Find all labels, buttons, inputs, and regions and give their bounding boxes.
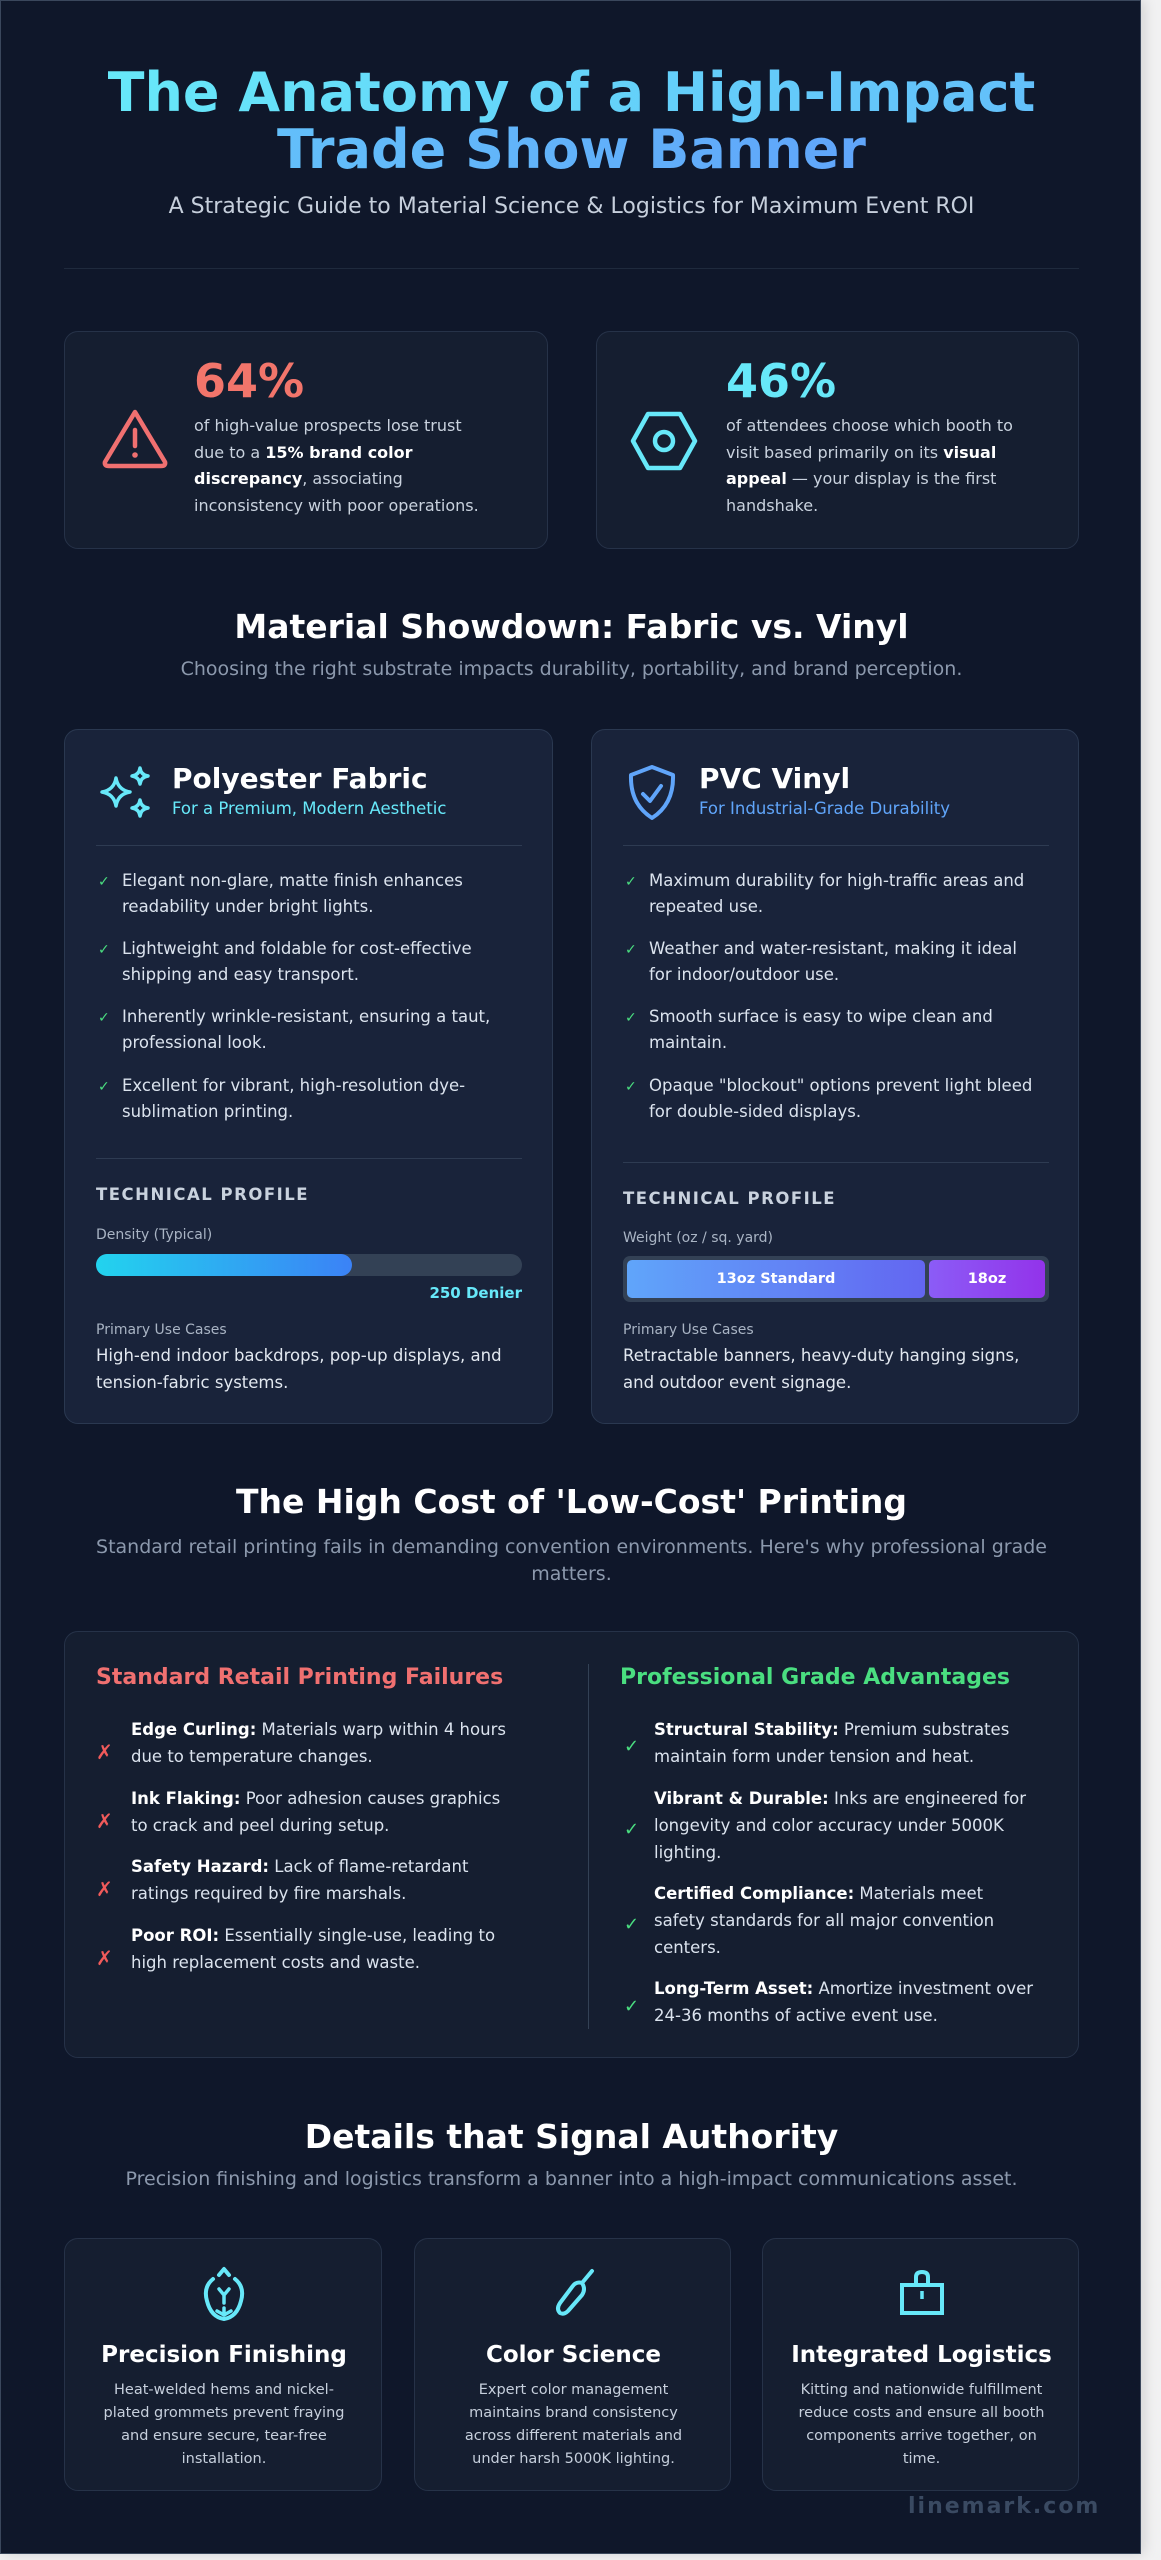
title: Polyester Fabric xyxy=(172,762,428,795)
column: advantages: maintain form under tension and heat. xyxy=(654,1747,974,1766)
title: PVC Vinyl xyxy=(699,762,850,795)
stat text: handshake. xyxy=(726,496,818,514)
column: failures: Safety Hazard: Lack of flame-retardant xyxy=(131,1857,468,1876)
column: failures xyxy=(96,1665,506,1972)
card: color science: Expert color management maintains brand consistency across different materials and under harsh 5000K lighting. xyxy=(465,2382,682,2467)
list: vinyl benefits: Weather and water-resistant, making it ideal xyxy=(649,939,1017,958)
subheading: Choosing the right substrate impacts durability, portability, and brand perception. xyxy=(181,658,962,680)
technical profile: Weight (oz / sq. yard) xyxy=(623,1230,773,1246)
list: vinyl benefits: repeated use. xyxy=(649,897,763,916)
list: fabric benefits: professional look. xyxy=(122,1033,267,1052)
icon: warning triangle xyxy=(102,410,168,468)
list: fabric benefits: ✓ xyxy=(98,942,110,958)
stat text: of attendees choose which booth to xyxy=(726,416,1013,435)
column: advantages xyxy=(620,1665,1034,2025)
list: vinyl benefits: maintain. xyxy=(649,1033,727,1052)
technical profile: High-end indoor backdrops, pop-up displays, and xyxy=(96,1346,502,1365)
title: Trade Show Banner xyxy=(277,118,866,181)
tagline: For a Premium, Modern Aesthetic xyxy=(172,799,446,818)
list: vinyl benefits: Maximum durability for high-traffic areas and xyxy=(649,871,1024,890)
list: fabric benefits: readability under bright lights. xyxy=(122,897,373,916)
stat text: of high-value prospects lose trust xyxy=(194,416,462,435)
panel: comparison xyxy=(64,1631,1079,2058)
icon: timer xyxy=(204,2266,244,2321)
list: vinyl benefits xyxy=(625,871,1032,1121)
technical profile: and outdoor event signage. xyxy=(623,1373,851,1392)
card: precision finishing xyxy=(64,2238,382,2491)
title xyxy=(108,61,1035,181)
column: advantages: Vibrant & Durable: Inks are engineered for xyxy=(654,1789,1026,1808)
stat text: due to a 15% brand color xyxy=(194,442,413,462)
column: failures: ✗ xyxy=(96,1740,113,1764)
column: advantages: safety standards for all major convention xyxy=(654,1911,994,1930)
card: precision finishing: Heat-welded hems and nickel-plated grommets prevent fraying and ensure secure, tear-free installation. xyxy=(104,2382,344,2467)
list: vinyl benefits: ✓ xyxy=(625,1010,637,1026)
panel: pvc vinyl xyxy=(591,729,1079,1424)
list: vinyl benefits: ✓ xyxy=(625,874,637,890)
column: failures: Ink Flaking: Poor adhesion causes graphics xyxy=(131,1789,500,1808)
column: failures: ratings required by fire marshals. xyxy=(131,1884,406,1903)
technical profile xyxy=(623,1189,1049,1392)
title: The Anatomy of a High-Impact xyxy=(108,61,1035,124)
column: advantages: 24-36 months of active event use. xyxy=(654,2006,938,2025)
technical profile: TECHNICAL PROFILE xyxy=(96,1185,309,1204)
column: advantages: Long-Term Asset: Amortize investment over xyxy=(654,1979,1033,1998)
column: advantages: longevity and color accuracy under 5000K xyxy=(654,1816,1004,1835)
list: fabric benefits xyxy=(98,871,490,1121)
technical profile: Primary Use Cases xyxy=(623,1322,754,1338)
column: failures: high replacement costs and waste. xyxy=(131,1953,420,1972)
bar: density xyxy=(96,1254,522,1276)
list: fabric benefits: Excellent for vibrant, high-resolution dye- xyxy=(122,1076,465,1095)
bar: weight xyxy=(623,1256,1049,1302)
list: fabric benefits: sublimation printing. xyxy=(122,1102,293,1121)
card: integrated logistics: Integrated Logistics xyxy=(791,2342,1052,2368)
column: failures: ✗ xyxy=(96,1946,113,1970)
panel: polyester fabric xyxy=(64,729,553,1424)
stat number: 64% xyxy=(194,354,304,408)
list: vinyl benefits: Smooth surface is easy to wipe clean and xyxy=(649,1007,993,1026)
column: failures: ✗ xyxy=(96,1809,113,1833)
list: vinyl benefits: Opaque "blockout" options prevent light bleed xyxy=(649,1076,1032,1095)
column: advantages: Structural Stability: Premium substrates xyxy=(654,1720,1009,1739)
stat text: inconsistency with poor operations. xyxy=(194,496,479,514)
icon: brush xyxy=(556,2268,594,2316)
column: failures: Edge Curling: Materials warp within 4 hours xyxy=(131,1720,506,1739)
stat number: 46% xyxy=(726,354,836,408)
heading: material showdown: Material Showdown: Fabric vs. Vinyl xyxy=(234,607,909,646)
list: vinyl benefits: for indoor/outdoor use. xyxy=(649,965,839,984)
icon: sparkles xyxy=(100,766,150,818)
list: fabric benefits: ✓ xyxy=(98,874,110,890)
technical profile: 250 Denier xyxy=(429,1284,522,1302)
stat text: discrepancy, associating xyxy=(194,469,403,488)
technical profile: Retractable banners, heavy-duty hanging signs, xyxy=(623,1346,1019,1365)
column: advantages: Certified Compliance: Materials meet xyxy=(654,1884,983,1903)
icon: hexagon nut xyxy=(630,412,698,470)
stat card: 46% xyxy=(596,331,1079,549)
technical profile: tension-fabric systems. xyxy=(96,1373,288,1392)
bar: weight: 18oz xyxy=(968,1271,1006,1287)
heading: details: Details that Signal Authority xyxy=(305,2117,838,2156)
stat card: 64% xyxy=(64,331,548,549)
technical profile xyxy=(96,1185,522,1392)
card: color science xyxy=(414,2238,731,2491)
bar: weight: 13oz Standard xyxy=(717,1271,835,1287)
stat text: appeal — your display is the first xyxy=(726,469,996,488)
stat text xyxy=(194,416,479,514)
column: advantages: ✓ xyxy=(624,1914,639,1935)
list: vinyl benefits: ✓ xyxy=(625,1079,637,1095)
list: vinyl benefits: for double-sided displays. xyxy=(649,1102,861,1121)
heading: high cost: The High Cost of 'Low-Cost' Printing xyxy=(236,1482,907,1521)
column: advantages: ✓ xyxy=(624,1736,639,1757)
column: advantages: Professional Grade Advantages xyxy=(620,1665,1010,1690)
column: failures: due to temperature changes. xyxy=(131,1747,373,1766)
column: advantages: centers. xyxy=(654,1938,721,1957)
list: vinyl benefits: ✓ xyxy=(625,942,637,958)
technical profile: Density (Typical) xyxy=(96,1227,212,1243)
column: failures: Poor ROI: Essentially single-use, leading to xyxy=(131,1926,495,1945)
stat text: visit based primarily on its visual xyxy=(726,442,996,462)
icon: shield xyxy=(628,765,676,820)
column: failures: ✗ xyxy=(96,1877,113,1901)
column: advantages: ✓ xyxy=(624,1819,639,1840)
technical profile: Primary Use Cases xyxy=(96,1322,227,1338)
list: fabric benefits: Lightweight and foldable for cost-effective xyxy=(122,939,472,958)
column: advantages: ✓ xyxy=(624,1996,639,2017)
list: fabric benefits: ✓ xyxy=(98,1010,110,1026)
card: color science: Color Science xyxy=(486,2342,661,2368)
card: integrated logistics xyxy=(762,2238,1079,2491)
tagline: For Industrial-Grade Durability xyxy=(699,799,950,818)
list: fabric benefits: ✓ xyxy=(98,1079,110,1095)
list: fabric benefits: shipping and easy transport. xyxy=(122,965,359,984)
card: precision finishing: Precision Finishing xyxy=(101,2342,347,2368)
list: fabric benefits: Inherently wrinkle-resistant, ensuring a taut, xyxy=(122,1007,490,1026)
subheading: Precision finishing and logistics transform a banner into a high-impact communications asset. xyxy=(125,2168,1018,2190)
technical profile: TECHNICAL PROFILE xyxy=(623,1189,836,1208)
watermark: linemark.com xyxy=(908,2494,1100,2519)
subtitle: A Strategic Guide to Material Science & Logistics for Maximum Event ROI xyxy=(169,194,974,219)
icon: package xyxy=(900,2270,944,2315)
column: failures: Standard Retail Printing Failures xyxy=(96,1665,503,1690)
column: advantages: lighting. xyxy=(654,1843,721,1862)
subheading: Standard retail printing fails in demanding convention environments. Here's why professional grade matters. xyxy=(96,1536,1047,1585)
stat text xyxy=(726,416,1013,514)
card: integrated logistics: Kitting and nationwide fulfillment reduce costs and ensure all booth components arrive together, on time. xyxy=(798,2382,1044,2467)
list: fabric benefits: Elegant non-glare, matte finish enhances xyxy=(122,871,463,890)
column: failures: to crack and peel during setup. xyxy=(131,1816,389,1835)
